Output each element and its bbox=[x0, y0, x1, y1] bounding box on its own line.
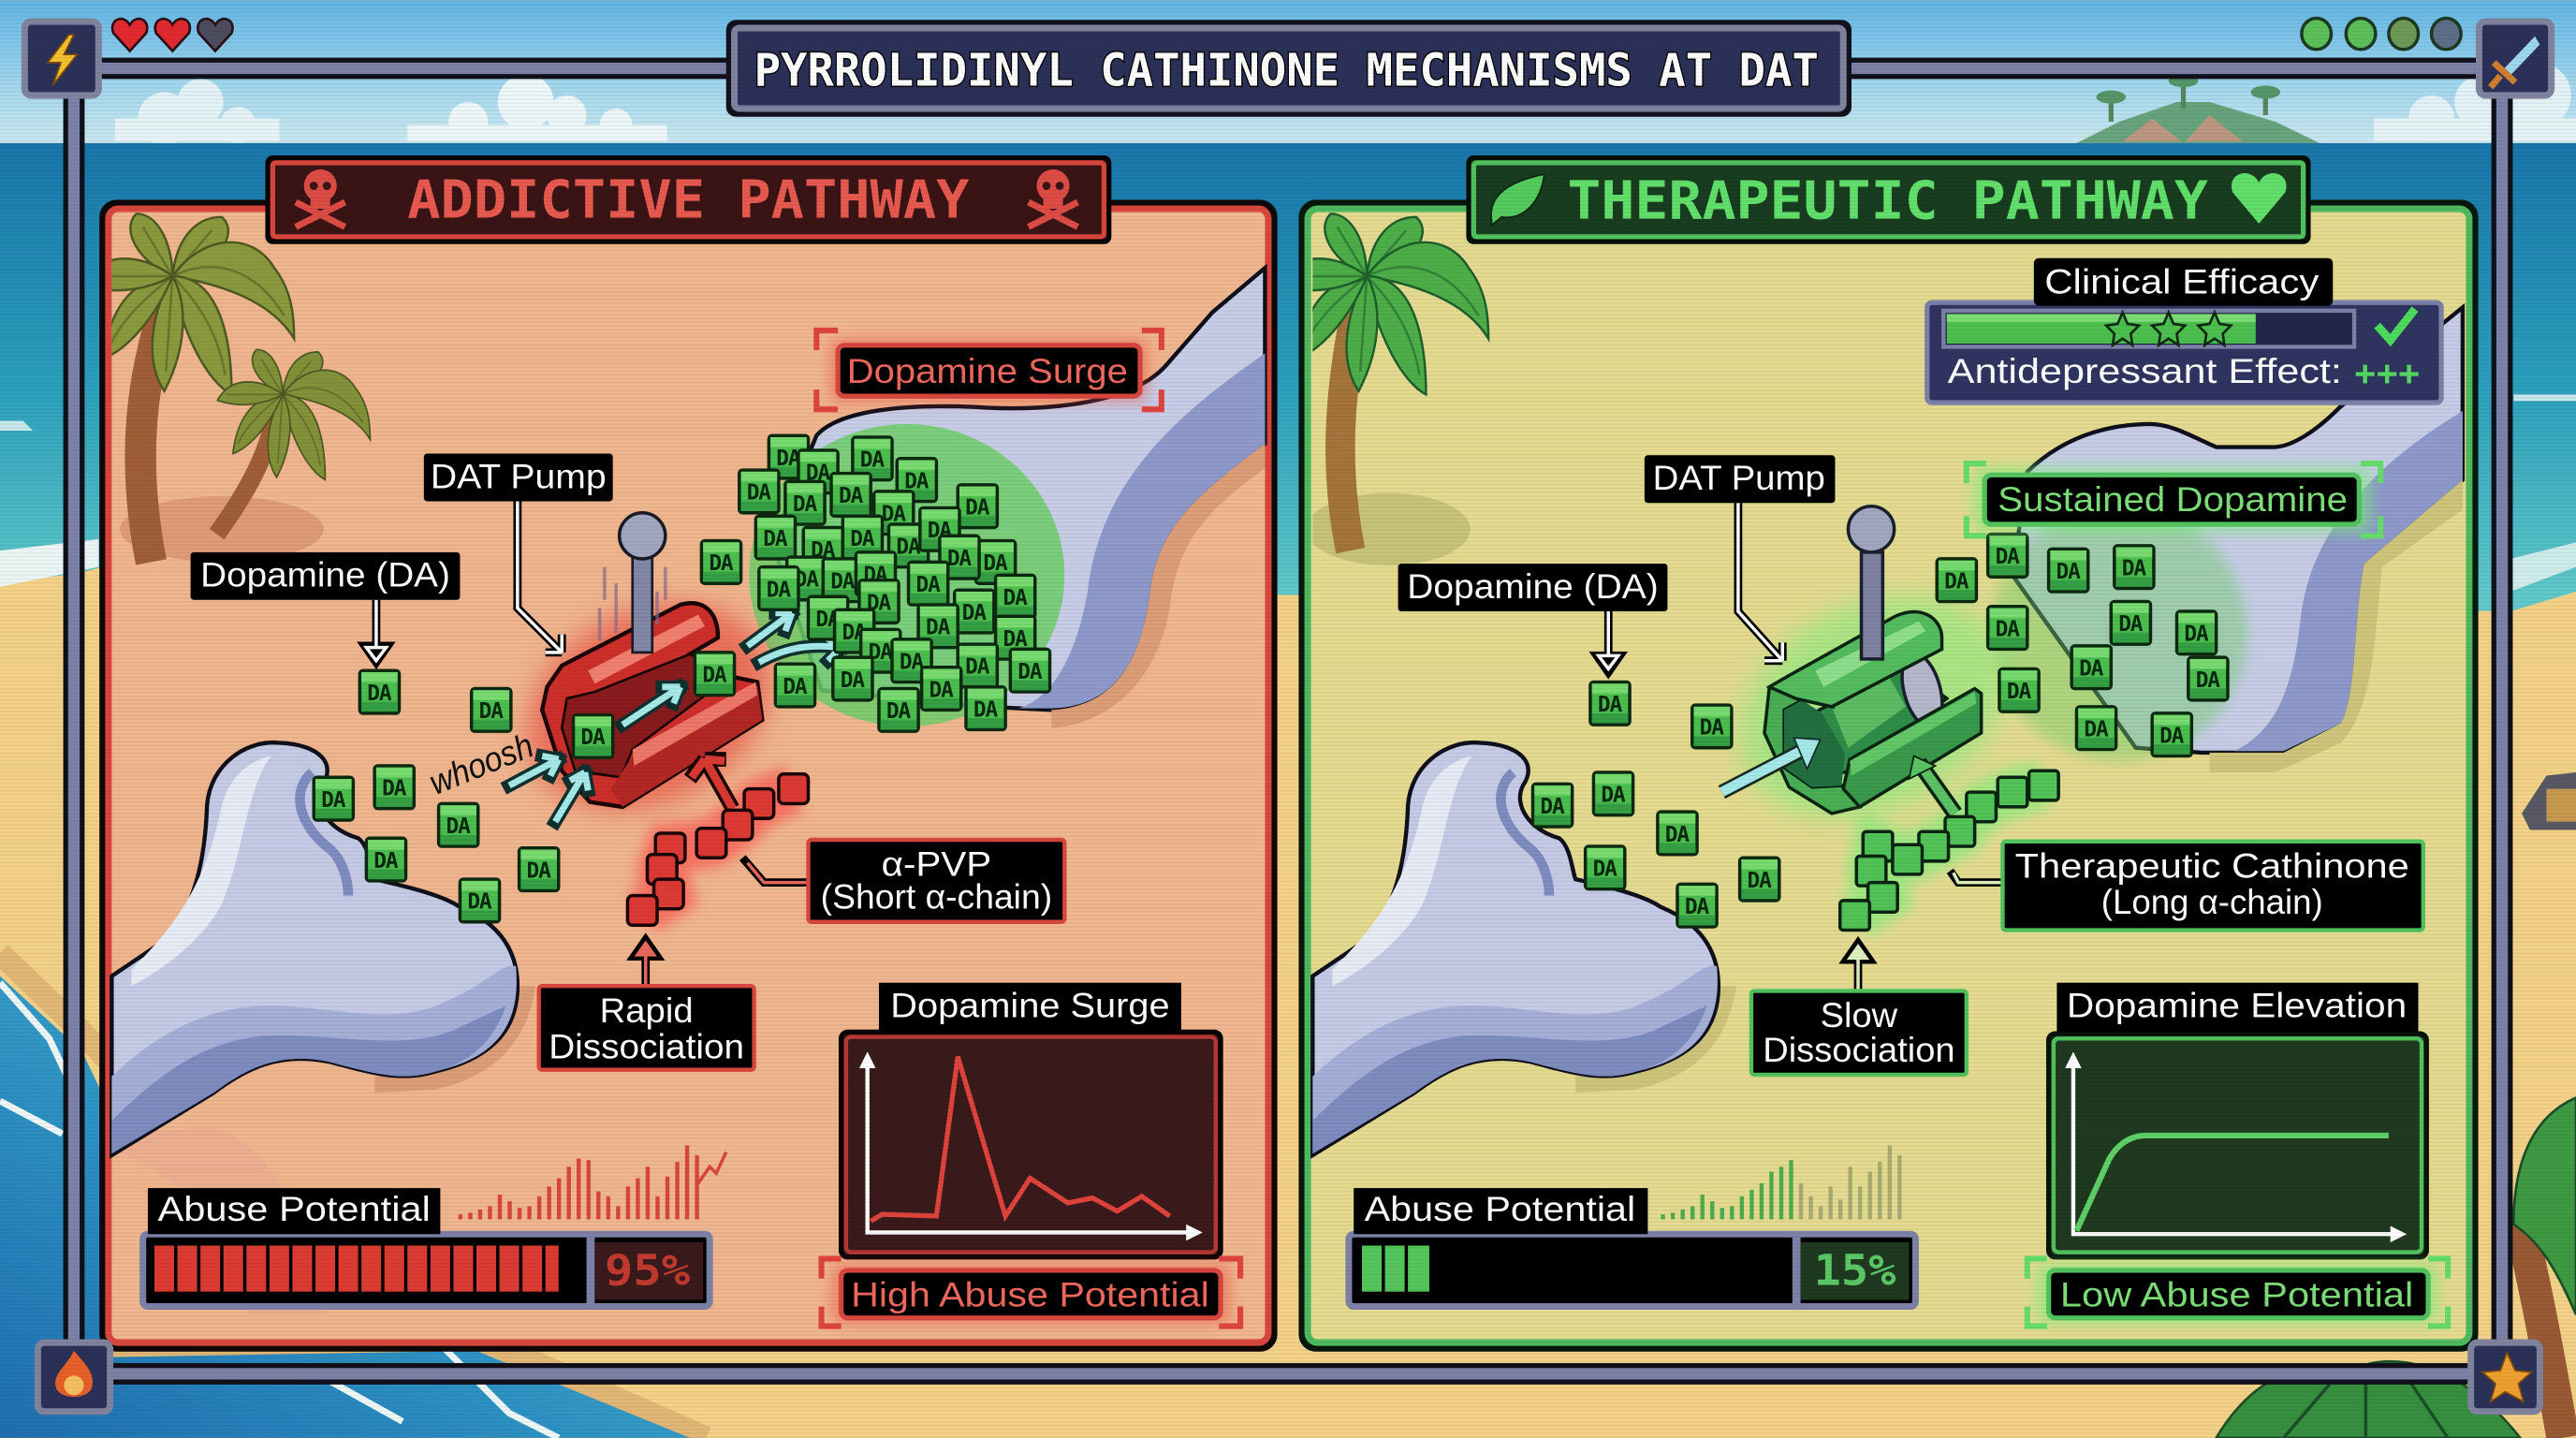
interior bbox=[562, 654, 729, 777]
dopamine molecules: left: DA bbox=[373, 849, 399, 873]
antidepressant text: Antidepressant Effect: bbox=[1948, 352, 2342, 390]
dopamine molecules: right: DA bbox=[1665, 823, 1690, 847]
dopamine molecules: right: DA bbox=[1601, 784, 1626, 808]
dopamine molecules: right: DA bbox=[2118, 612, 2144, 637]
dopamine molecules: left: DA bbox=[806, 462, 830, 486]
label: slow dissociation bbox=[1751, 944, 1967, 1075]
dopamine molecules: left: DA bbox=[795, 568, 819, 593]
header: addictive pathway: ADDICTIVE PATHWAY bbox=[407, 170, 970, 231]
panel background bbox=[1303, 204, 2474, 1347]
label: rapid dissociation: Dissociation bbox=[549, 1027, 744, 1065]
upper bar highlight bbox=[588, 615, 705, 683]
dopamine molecules: right bbox=[1531, 533, 2230, 929]
dopamine molecules: right: DA bbox=[1685, 895, 1709, 919]
gauge: abuse potential 15 percent bbox=[1349, 1188, 1915, 1306]
label: dopamine left: Dopamine (DA) bbox=[200, 556, 450, 594]
dopamine molecules: left: DA bbox=[841, 668, 865, 693]
dopamine molecules: left: DA bbox=[382, 777, 407, 801]
dopamine molecules: left: DA bbox=[860, 448, 885, 473]
gray core bbox=[1895, 649, 1950, 731]
dopamine molecules: left: DA bbox=[842, 621, 867, 645]
lower bar face bbox=[611, 685, 762, 807]
label: dopamine right: Dopamine (DA) bbox=[1407, 567, 1659, 606]
dopamine molecules: left: DA bbox=[815, 608, 841, 632]
gauge label: Abuse Potential bbox=[157, 1190, 431, 1228]
palm tree bbox=[1312, 213, 1490, 565]
icon: skull left bbox=[296, 169, 345, 227]
dopamine molecules: right: DA bbox=[2196, 668, 2220, 693]
dopamine molecules: left: DA bbox=[929, 678, 954, 702]
background: wet sand band bbox=[0, 953, 707, 1438]
dopamine molecules: left: DA bbox=[367, 682, 392, 706]
gauge label bbox=[1354, 1188, 1647, 1234]
gauge value bbox=[1801, 1242, 1909, 1299]
dopamine molecules: right: DA bbox=[2184, 623, 2209, 647]
presynaptic terminal bbox=[111, 742, 535, 1155]
clinical efficacy panel bbox=[1927, 258, 2441, 403]
hole bbox=[1784, 700, 1845, 787]
panel: therapeutic pathway bbox=[1277, 204, 2474, 1347]
dopamine molecules: left: DA bbox=[900, 650, 925, 674]
efficacy stars bbox=[2106, 313, 2231, 345]
panel: addictive pathway bbox=[82, 204, 1273, 1347]
chart: dopamine elevation bbox=[2049, 983, 2426, 1257]
dopamine molecules: left: DA bbox=[793, 492, 817, 517]
dopamine molecules: left: DA bbox=[467, 890, 492, 915]
dopamine molecules: left: DA bbox=[947, 547, 972, 571]
dopamine molecules: left: DA bbox=[965, 495, 990, 520]
background: rock bbox=[2522, 772, 2576, 829]
dopamine molecules: left: DA bbox=[973, 697, 998, 722]
dopamine molecules: left: DA bbox=[915, 573, 941, 597]
dopamine molecules: left: DA bbox=[928, 519, 952, 543]
dopamine molecules: right: DA bbox=[2159, 724, 2185, 748]
gauge label bbox=[148, 1188, 440, 1234]
dopamine molecules: left: DA bbox=[1003, 627, 1028, 652]
rod head bbox=[620, 513, 666, 559]
background: sand bbox=[0, 567, 2576, 1438]
header: therapeutic pathway: THERAPEUTIC PATHWAY bbox=[1567, 171, 2208, 232]
label: slow dissociation: Slow bbox=[1821, 996, 1898, 1034]
dopamine molecules: left: DA bbox=[702, 664, 727, 688]
whoosh label: whoosh bbox=[424, 726, 539, 802]
title bar bbox=[729, 23, 1848, 113]
gauge segments bbox=[154, 1246, 559, 1292]
dopamine molecules: left: DA bbox=[839, 484, 864, 508]
chart title: Dopamine Elevation bbox=[2067, 987, 2407, 1025]
dopamine molecules: left: DA bbox=[1017, 660, 1043, 684]
chart title bbox=[2056, 983, 2419, 1032]
icon: heart bbox=[2232, 173, 2287, 224]
elevation line bbox=[2076, 1136, 2389, 1231]
dopamine molecules: left: DA bbox=[580, 726, 606, 750]
dopamine molecules: left: DA bbox=[446, 814, 471, 839]
chart title bbox=[879, 983, 1181, 1032]
rod head bbox=[1848, 506, 1895, 552]
chain glow bbox=[1855, 785, 2043, 916]
dopamine molecules: left: DA bbox=[965, 655, 990, 680]
label: rapid dissociation: Rapid bbox=[600, 991, 694, 1030]
dopamine molecules: left: DA bbox=[904, 469, 929, 493]
efficacy label: Clinical Efficacy bbox=[2044, 262, 2320, 301]
palm: bottom right bbox=[2217, 1098, 2576, 1438]
dopamine molecules: left: DA bbox=[1003, 586, 1028, 610]
rod bbox=[633, 555, 652, 653]
palm trees bbox=[82, 213, 370, 562]
label: therapeutic cathinone: Therapeutic Cathinone bbox=[2015, 846, 2409, 885]
rod bbox=[1862, 552, 1882, 659]
chain glow bbox=[642, 789, 794, 910]
label: dopamine right bbox=[1398, 564, 1667, 672]
sparkline: left abuse bbox=[459, 1145, 726, 1219]
chart: dopamine surge bbox=[842, 983, 1221, 1257]
label: DAT pump right bbox=[1645, 455, 1835, 661]
callout: dopamine surge top bbox=[816, 330, 1162, 409]
dopamine molecules: right: DA bbox=[1748, 869, 1772, 893]
label: rapid dissociation bbox=[539, 940, 754, 1070]
dopamine molecules: left: DA bbox=[926, 616, 951, 640]
icon: check bbox=[2378, 309, 2415, 340]
progress gems bbox=[2302, 18, 2461, 50]
dopamine molecules: left: DA bbox=[869, 640, 893, 665]
plus marks: +++ bbox=[2354, 355, 2420, 395]
right glow bbox=[1702, 551, 2044, 862]
label: alpha-PVP: (Short α-chain) bbox=[821, 878, 1052, 917]
corner icon: sword bbox=[2479, 22, 2552, 95]
lives: hearts bbox=[112, 19, 233, 51]
dopamine molecules: left: DA bbox=[983, 551, 1008, 576]
dopamine molecules: left: DA bbox=[850, 527, 875, 551]
flow arrow: right bbox=[1721, 738, 1821, 792]
gauge value: 15% bbox=[1814, 1246, 1896, 1296]
dopamine molecules: right: DA bbox=[1540, 795, 1565, 819]
background: sea bbox=[0, 143, 2576, 611]
inner cylinder bbox=[1808, 666, 1947, 772]
motion ticks bbox=[600, 567, 666, 641]
left glows bbox=[491, 563, 807, 851]
lower bar bbox=[1843, 689, 1982, 807]
callout: high abuse potential bbox=[822, 1259, 1240, 1327]
gauge divider bbox=[1793, 1236, 1801, 1305]
label: slow dissociation: Dissociation bbox=[1763, 1031, 1955, 1069]
callout: dopamine surge top: Dopamine Surge bbox=[847, 352, 1128, 390]
label: therapeutic cathinone bbox=[1950, 842, 2423, 931]
dopamine molecules: left: DA bbox=[886, 699, 911, 724]
alpha-PVP chain bbox=[627, 774, 809, 925]
callout: high abuse potential: High Abuse Potential bbox=[851, 1275, 1209, 1313]
dopamine molecules: left: DA bbox=[763, 527, 788, 551]
label: DAT pump left: DAT Pump bbox=[431, 457, 607, 495]
C body bbox=[1764, 666, 1860, 814]
callout: low abuse potential: Low Abuse Potential bbox=[2060, 1275, 2413, 1313]
dopamine molecules: right: DA bbox=[2079, 656, 2104, 681]
dopamine molecules: right: DA bbox=[1944, 569, 1969, 594]
dopamine molecules: right: DA bbox=[1598, 693, 1622, 717]
dopamine molecules: left: DA bbox=[830, 569, 856, 594]
corner icon: lightning bbox=[24, 22, 98, 95]
dopamine molecules: right: DA bbox=[1700, 716, 1724, 741]
gauge: abuse potential 95 percent bbox=[143, 1188, 710, 1306]
header: addictive pathway bbox=[268, 158, 1109, 242]
dopamine molecules: left: DA bbox=[776, 447, 801, 471]
sparkline: right abuse bbox=[1661, 1145, 1902, 1219]
dopamine molecules: left: DA bbox=[962, 601, 987, 625]
icon: leaf bbox=[1491, 174, 1544, 226]
binding arrow: green bbox=[1909, 756, 1955, 814]
pump silhouette bbox=[542, 603, 762, 807]
presynaptic terminal bbox=[1312, 742, 1736, 1155]
gauge value: 95% bbox=[605, 1246, 691, 1296]
dopamine molecules: right: DA bbox=[1996, 545, 2020, 569]
dopamine molecules: left: DA bbox=[783, 675, 808, 699]
label: therapeutic cathinone: (Long α-chain) bbox=[2101, 883, 2323, 921]
dopamine molecules: left: DA bbox=[479, 699, 504, 724]
axes bbox=[859, 1051, 1203, 1240]
label: DAT pump right: DAT Pump bbox=[1653, 459, 1825, 497]
label: DAT pump left bbox=[424, 454, 613, 653]
label: alpha-PVP: α-PVP bbox=[882, 845, 991, 884]
postsynaptic terminal bbox=[749, 268, 1265, 728]
background: distant island bbox=[2076, 74, 2320, 143]
background: sky bbox=[0, 0, 2576, 145]
title: PYRROLIDINYL CATHINONE MECHANISMS AT DAT bbox=[754, 44, 1819, 96]
dopamine molecules: right: DA bbox=[2007, 680, 2031, 704]
background: wave foam bbox=[0, 983, 559, 1438]
panel background bbox=[104, 204, 1273, 1347]
dopamine molecules: right: DA bbox=[1996, 617, 2020, 641]
dopamine molecules: left: DA bbox=[527, 858, 551, 883]
dopamine molecules: left: DA bbox=[767, 578, 791, 602]
postsynaptic terminal bbox=[1991, 307, 2463, 772]
dopamine molecules: left: DA bbox=[709, 551, 734, 576]
surge line bbox=[871, 1057, 1170, 1221]
dopamine molecules: left bbox=[312, 433, 1051, 924]
axes bbox=[2065, 1051, 2407, 1242]
dopamine molecules: right: DA bbox=[1593, 858, 1617, 882]
callout: low abuse potential bbox=[2027, 1259, 2448, 1327]
label: dopamine left bbox=[191, 552, 460, 662]
dopamine molecules: left: DA bbox=[867, 591, 891, 615]
background: shore foam bbox=[0, 394, 2576, 592]
upper bar bbox=[1769, 611, 1942, 707]
corner icon: fire bbox=[37, 1343, 110, 1412]
dopamine molecules: left: DA bbox=[321, 788, 346, 813]
label: alpha-PVP bbox=[742, 840, 1064, 922]
gauge value bbox=[594, 1242, 703, 1299]
callout: sustained dopamine: Sustained Dopamine bbox=[1998, 480, 2348, 519]
binding arrow: red bbox=[690, 759, 733, 809]
dopamine molecules: left: DA bbox=[896, 536, 921, 560]
gauge segments bbox=[1362, 1246, 1429, 1292]
efficacy bar bbox=[1943, 311, 2354, 346]
flow arrows: left bbox=[509, 613, 842, 822]
gauge divider bbox=[587, 1236, 594, 1305]
dopamine molecules: right: DA bbox=[2084, 717, 2109, 741]
corner icon: star bbox=[2471, 1343, 2539, 1412]
dopamine molecules: left: DA bbox=[747, 481, 771, 506]
background: shoreline water bbox=[0, 976, 690, 1438]
icon: skull right bbox=[1029, 169, 1077, 227]
dopamine molecules: left: DA bbox=[811, 538, 836, 563]
gauge label: Abuse Potential bbox=[1365, 1190, 1635, 1228]
ghosted shoreline bbox=[115, 1127, 329, 1314]
DAT pump: red bbox=[542, 513, 762, 807]
dopamine molecules: right: DA bbox=[2122, 556, 2146, 580]
dopamine molecules: left: DA bbox=[882, 503, 906, 527]
background: clouds bbox=[115, 63, 2576, 145]
chart title: Dopamine Surge bbox=[890, 987, 1170, 1025]
DAT pump: green bbox=[1764, 506, 1982, 814]
dopamine molecules: left: DA bbox=[863, 563, 888, 587]
dopamine molecules: right: DA bbox=[2056, 560, 2081, 584]
callout: sustained dopamine bbox=[1967, 463, 2380, 536]
lower bar ridge bbox=[633, 682, 757, 766]
efficacy label bbox=[2034, 258, 2333, 306]
therapeutic cathinone chain bbox=[1840, 770, 2058, 931]
header: therapeutic pathway bbox=[1469, 158, 2308, 242]
